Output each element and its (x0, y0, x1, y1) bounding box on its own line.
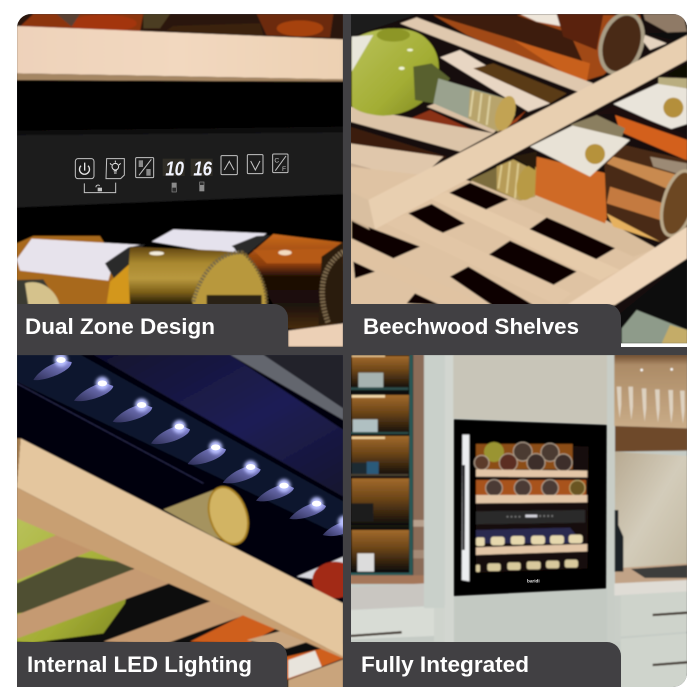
front rail (368, 35, 687, 229)
second gold cap (470, 158, 523, 200)
LED 3 (113, 398, 152, 422)
top rack bottles (474, 442, 573, 472)
fourth rack bottles (476, 560, 578, 572)
icon: lock bracket (84, 183, 116, 193)
below shelf (48, 585, 316, 656)
icon: zone selector (136, 158, 154, 178)
icon: celsius fahrenheit button: C (274, 157, 279, 164)
control strip (17, 128, 343, 211)
LED 8 (289, 497, 326, 519)
LED 9 (323, 516, 350, 536)
third rack bottles (476, 528, 583, 546)
LED 7 (256, 479, 294, 501)
icon: power button (75, 159, 94, 179)
LED 5 (188, 441, 226, 465)
LED 4 (151, 420, 190, 444)
second rack bottles (476, 480, 586, 496)
shelf (17, 26, 343, 79)
gold cap (162, 488, 221, 540)
wine cooler (454, 419, 607, 596)
icon: up button (221, 156, 237, 175)
lower shelf base (350, 167, 657, 305)
photo: control panel and bottles (17, 14, 343, 350)
icon: zone indicators (172, 182, 204, 192)
label: dual zone design: Dual Zone Design (25, 314, 215, 339)
wall strip (413, 355, 424, 577)
label: dual zone design (17, 304, 288, 355)
icon: down button (247, 155, 263, 174)
photo: kitchen setting (350, 355, 687, 688)
window (476, 444, 588, 573)
right side (614, 355, 687, 428)
temperature display: 10 (165, 158, 184, 181)
bottle row (17, 236, 140, 305)
photo: LEDs above wooden shelf (17, 355, 358, 688)
icon: celsius fahrenheit button (273, 154, 288, 173)
temperature display: 16 (193, 158, 212, 181)
label: beechwood shelves (351, 304, 621, 355)
label: beechwood shelves: Beechwood Shelves (363, 314, 579, 339)
icon: light button (106, 159, 124, 179)
label: internal LED lighting (17, 642, 287, 687)
upper right bottle (613, 83, 687, 129)
label: internal LED lighting: Internal LED Lighting (27, 652, 252, 677)
wood rail (17, 438, 343, 657)
panel: dual zone design photo (17, 14, 343, 350)
label: fully integrated (351, 642, 621, 687)
panel: fully integrated kitchen photo (350, 355, 687, 688)
LED 1 (33, 353, 72, 380)
temperature display (162, 158, 212, 176)
brand mark: baridi (527, 579, 540, 584)
mini control panel (476, 510, 585, 524)
photo: angled wooden shelves and bottles (350, 8, 700, 350)
countertop (350, 583, 443, 610)
panel: internal LED lighting photo (17, 353, 358, 688)
LED strip (33, 353, 350, 536)
green bottle (352, 28, 439, 116)
panel: beechwood shelves photo (350, 8, 700, 350)
lower right bottle (534, 156, 608, 224)
display cabinet (350, 355, 413, 575)
back bottle (433, 15, 645, 83)
LED 2 (74, 377, 113, 401)
column and panels (424, 355, 445, 608)
handle (462, 435, 469, 581)
icon: celsius fahrenheit button: F (282, 166, 286, 173)
LED 6 (223, 460, 261, 483)
upper slats (400, 17, 593, 93)
white bottle cap (432, 78, 516, 119)
label: fully integrated: Fully Integrated (361, 652, 529, 677)
